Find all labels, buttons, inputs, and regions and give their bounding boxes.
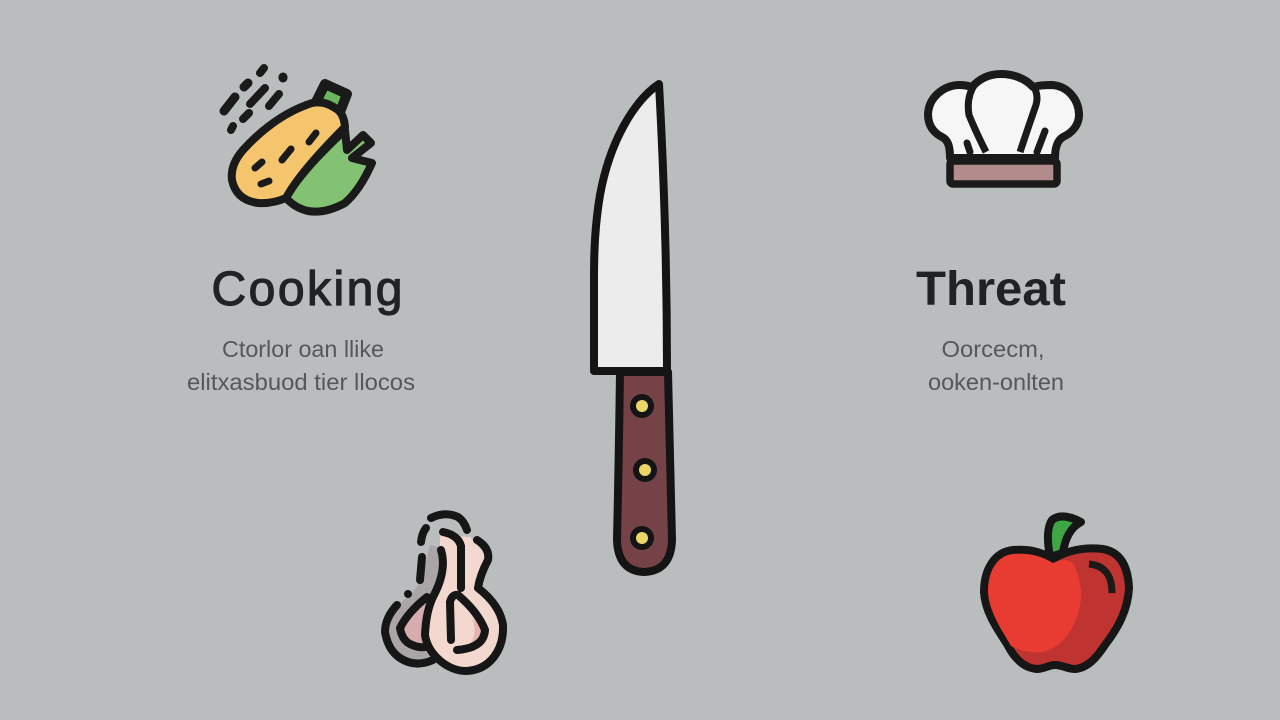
text block: threat description bbox=[928, 336, 1064, 395]
corn body bbox=[232, 102, 345, 203]
corn kernels bbox=[255, 133, 316, 184]
hat pleats bbox=[967, 84, 1045, 152]
clove outlines bbox=[385, 514, 503, 671]
hat puff bbox=[928, 74, 1079, 158]
knife blade bbox=[594, 84, 667, 371]
text block: cooking description: Ctorlor oan llike bbox=[222, 336, 384, 362]
rear pink shade bbox=[400, 597, 427, 647]
apple shine mark bbox=[1089, 564, 1112, 593]
heading: Cooking: Cooking bbox=[212, 263, 402, 316]
icon: corn vegetable bbox=[224, 68, 372, 212]
icon: chef knife bbox=[594, 84, 672, 572]
leaf husk bbox=[286, 130, 372, 212]
icon: red apple bbox=[984, 516, 1129, 669]
knife handle bbox=[617, 372, 672, 572]
apple highlight bbox=[988, 554, 1081, 652]
text block: cooking description: elitxasbuod tier llocos bbox=[187, 369, 415, 395]
front clove bbox=[426, 535, 503, 671]
rear clove bbox=[387, 545, 444, 667]
apple stem bbox=[1048, 516, 1081, 557]
falling seasoning specks bbox=[224, 68, 283, 130]
nook shading bbox=[464, 618, 485, 649]
icon: garlic clove bbox=[385, 514, 503, 671]
text block: cooking description bbox=[187, 336, 415, 395]
handle rivets bbox=[630, 394, 657, 550]
heading: Threat: Threat bbox=[916, 263, 1066, 316]
apple body bbox=[984, 548, 1129, 669]
icon: chef hat bbox=[928, 74, 1079, 184]
text block: threat description: ooken-onlten bbox=[928, 369, 1064, 395]
hat band bbox=[950, 161, 1057, 184]
stem cap bbox=[316, 84, 347, 112]
text block: threat description: Oorcecm, bbox=[942, 336, 1044, 362]
